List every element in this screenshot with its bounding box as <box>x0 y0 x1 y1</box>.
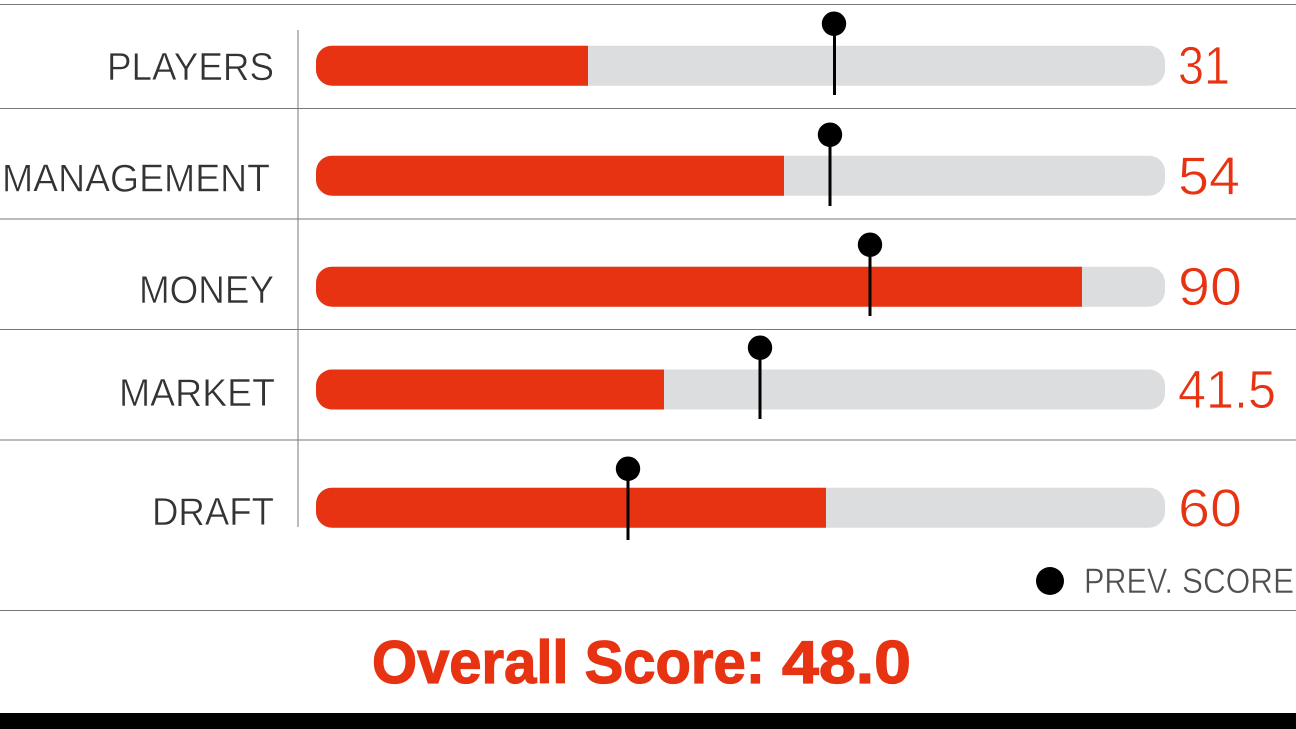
value: players: 31 <box>1178 36 1230 96</box>
overall score: Overall Score: <box>372 629 765 696</box>
row: money <box>139 232 1242 317</box>
overall score: 48.0 <box>782 629 911 696</box>
row: market <box>119 336 1276 420</box>
bottom black band <box>0 713 1296 729</box>
row: management <box>2 122 1240 206</box>
label: market: MARKET <box>119 372 275 415</box>
bar: market <box>316 370 1165 410</box>
value: money: 90 <box>1178 257 1242 317</box>
marker: draft previous score <box>616 456 640 540</box>
value: management: 54 <box>1178 146 1240 206</box>
marker: market previous score <box>748 336 772 419</box>
bar: management <box>316 156 1165 196</box>
label: players: PLAYERS <box>107 46 274 89</box>
marker: management previous score <box>818 122 842 206</box>
label: management: MANAGEMENT <box>2 158 270 200</box>
marker: money previous score <box>858 232 882 316</box>
value: market: 41.5 <box>1178 360 1276 420</box>
row: players <box>107 12 1230 96</box>
label: money: MONEY <box>139 269 274 312</box>
bar: money <box>316 267 1165 307</box>
marker: players previous score <box>822 12 846 95</box>
label: draft: DRAFT <box>152 491 274 534</box>
legend: previous score <box>1036 562 1294 601</box>
bar: players <box>316 46 1165 86</box>
row: draft <box>152 456 1242 540</box>
value: draft: 60 <box>1178 478 1242 538</box>
bar: draft <box>316 488 1165 528</box>
legend: previous score: PREV. <box>1084 562 1173 601</box>
